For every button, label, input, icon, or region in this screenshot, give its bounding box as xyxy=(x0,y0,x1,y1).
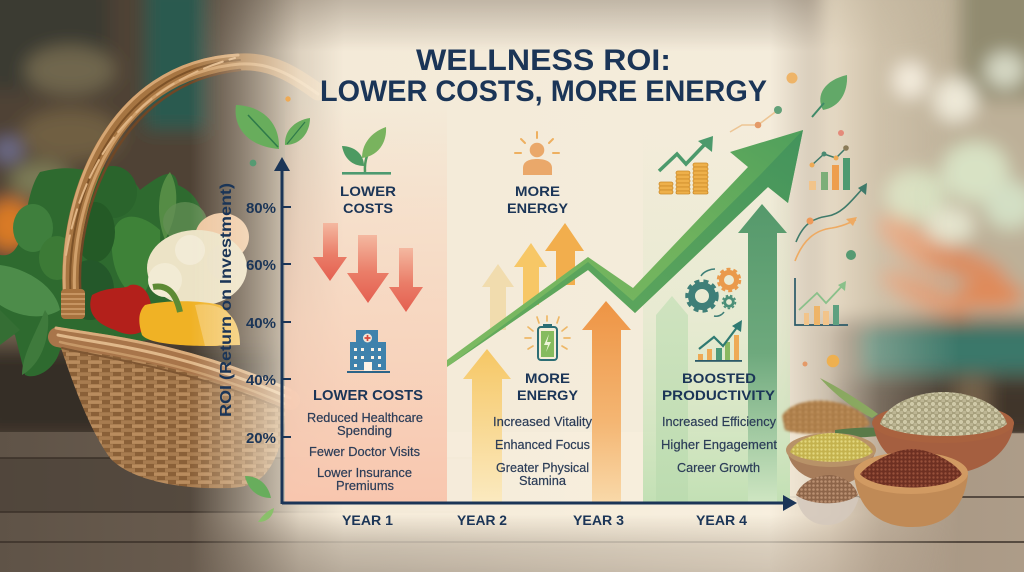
rising arrows xyxy=(463,204,787,503)
icon: sprout at axis top xyxy=(236,96,310,166)
year labels: YEAR 2 xyxy=(457,513,507,528)
icon: leaf top right xyxy=(812,75,847,117)
icon: gears xyxy=(687,269,740,316)
text: more energy list: ENERGY xyxy=(517,387,579,403)
wicker basket xyxy=(0,55,318,488)
text: lower costs list: Fewer Doctor Visits xyxy=(309,445,420,459)
heading: more energy top xyxy=(507,183,569,216)
basket body xyxy=(60,345,288,488)
small leaf bottom xyxy=(258,508,274,522)
title: WELLNESS ROI: xyxy=(416,44,671,77)
glass bowl xyxy=(796,475,859,525)
y axis title: ROI (Return on Investment) xyxy=(218,183,235,417)
small leaf near origin xyxy=(245,476,271,498)
icon: bar chart xyxy=(809,145,850,190)
yellow millet bowl xyxy=(786,433,876,482)
y axis labels: 40% xyxy=(246,315,276,332)
stalk leaves xyxy=(820,378,878,418)
text: more energy list: Stamina xyxy=(519,474,566,488)
heading: lower costs: LOWER xyxy=(340,183,396,199)
heading: more energy top: ENERGY xyxy=(507,200,569,216)
y axis labels: 40% xyxy=(246,372,276,389)
basket rim xyxy=(56,328,290,412)
panel: year 4 xyxy=(643,130,790,503)
icon: hospital xyxy=(347,330,390,373)
text: boosted productivity list: Career Growth xyxy=(677,461,760,475)
y axis labels xyxy=(246,200,276,447)
cream overlay xyxy=(190,0,960,572)
icon: person with rays xyxy=(515,132,559,175)
basket handle xyxy=(64,55,318,305)
text: lower costs list: Lower Insurance xyxy=(317,466,412,480)
text: lower costs list: Spending xyxy=(337,424,392,438)
y axis xyxy=(218,157,291,504)
icon: battery xyxy=(525,316,570,360)
bell peppers xyxy=(90,285,240,346)
year labels: YEAR 1 xyxy=(342,513,393,528)
text: more energy list: Greater Physical xyxy=(496,461,589,475)
down arrows xyxy=(313,223,423,312)
y axis labels: 80% xyxy=(246,200,276,217)
grains and bowls xyxy=(782,378,1014,527)
text: lower costs list: Premiums xyxy=(336,479,394,493)
text: boosted productivity list xyxy=(661,370,778,475)
text: more energy list: Enhanced Focus xyxy=(495,438,590,452)
text: boosted productivity list: Higher Engagement xyxy=(661,438,778,452)
greens xyxy=(0,166,207,376)
year labels: YEAR 3 xyxy=(573,513,624,528)
title xyxy=(320,44,767,108)
year labels xyxy=(342,513,747,528)
heading: lower costs: COSTS xyxy=(343,200,393,216)
text: more energy list: MORE xyxy=(525,370,570,386)
y axis labels: 20% xyxy=(246,430,276,447)
text: lower costs list: LOWER COSTS xyxy=(313,387,423,404)
year 1 content xyxy=(307,127,423,493)
cauliflower xyxy=(147,213,249,306)
year labels: YEAR 4 xyxy=(696,513,747,528)
icon: coins and trend xyxy=(659,136,713,194)
text: lower costs list xyxy=(307,387,423,493)
heading: lower costs xyxy=(340,183,396,216)
text: lower costs list: Reduced Healthcare xyxy=(307,411,423,425)
text: boosted productivity list: BOOSTED xyxy=(682,370,756,386)
large terracotta bowl xyxy=(872,392,1014,474)
icon: trend curves xyxy=(795,183,867,261)
x axis xyxy=(282,495,797,528)
y axis labels: 60% xyxy=(246,257,276,274)
decorative icons right xyxy=(730,72,867,367)
icon: productivity chart xyxy=(695,320,742,362)
panel: year 1 xyxy=(285,100,447,503)
icon: sprout xyxy=(342,127,391,175)
text: boosted productivity list: Increased Efficiency xyxy=(662,415,777,429)
heading: more energy top: MORE xyxy=(515,183,560,199)
title: LOWER COSTS, MORE ENERGY xyxy=(320,75,767,108)
brown grain pile xyxy=(782,401,870,434)
text: more energy list xyxy=(493,370,593,488)
text: boosted productivity list: PRODUCTIVITY xyxy=(662,387,776,403)
red grain bowl xyxy=(854,449,968,527)
handle wrap xyxy=(61,289,85,319)
main growth arrow xyxy=(447,130,803,367)
icon: small axis chart xyxy=(795,278,848,325)
small trend line xyxy=(730,106,782,132)
text: more energy list: Increased Vitality xyxy=(493,415,593,429)
